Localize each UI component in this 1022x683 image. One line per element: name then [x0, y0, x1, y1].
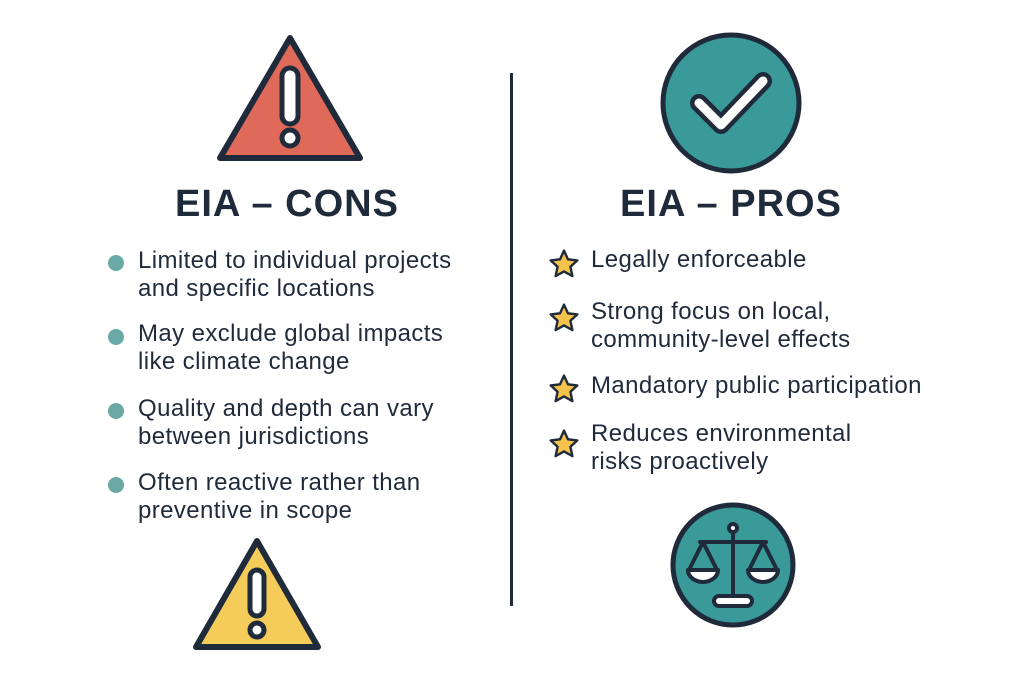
heading: cons: EIA – CONS [175, 183, 399, 225]
list: cons: preventive in scope [138, 497, 352, 524]
list: cons: like climate change [138, 348, 350, 375]
list: cons: and specific locations [138, 275, 375, 302]
pro 2 [549, 298, 851, 353]
bullet 4 [108, 469, 421, 524]
heading: pros: EIA – PROS [620, 183, 842, 225]
list: cons: May exclude global impacts [138, 320, 443, 347]
divider [510, 73, 513, 606]
list: pros: Legally enforceable [591, 246, 807, 273]
bullet 2 [108, 320, 443, 375]
bullet 1 [108, 247, 452, 302]
icon: scales of justice [670, 502, 796, 628]
list: cons: Quality and depth can vary [138, 395, 434, 422]
list: pros [549, 246, 922, 475]
bullet 3 [108, 395, 434, 450]
list: cons: Limited to individual projects [138, 247, 452, 274]
list: pros: risks proactively [591, 448, 769, 475]
icon: red warning triangle [217, 35, 363, 161]
list: cons [108, 247, 452, 524]
list: cons: Often reactive rather than [138, 469, 421, 496]
pro 4 [549, 420, 852, 475]
list: cons: between jurisdictions [138, 423, 369, 450]
icon: yellow warning triangle [193, 538, 321, 650]
list: pros: Reduces environmental [591, 420, 852, 447]
list: pros: Strong focus on local, [591, 298, 831, 325]
list: pros: Mandatory public participation [591, 372, 922, 399]
icon: check circle [660, 32, 802, 174]
pro 3 [549, 372, 922, 402]
pro 1 [549, 246, 807, 278]
list: pros: community-level effects [591, 326, 851, 353]
